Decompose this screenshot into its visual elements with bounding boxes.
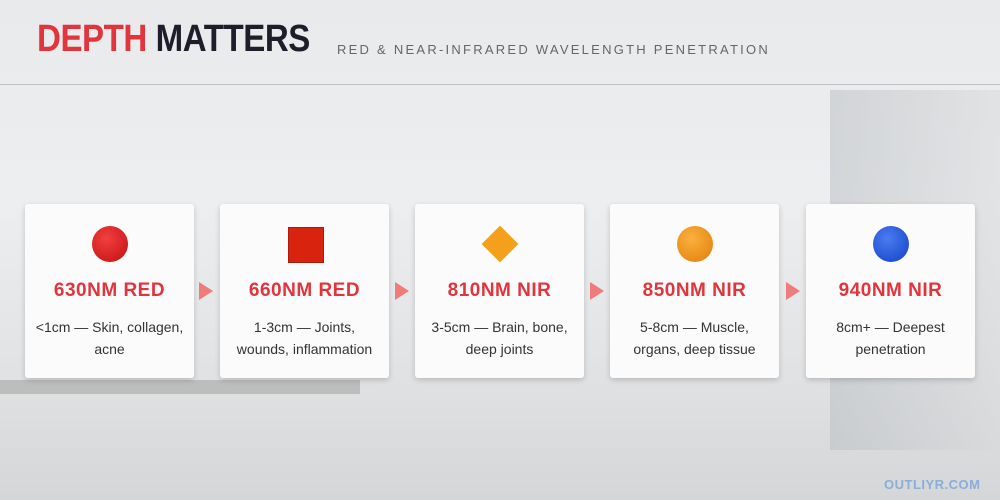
card: 630nm: 630NM RED xyxy=(54,280,165,301)
card: 850nm: 850NM NIR xyxy=(643,280,746,301)
card: 940nm xyxy=(806,204,975,378)
icon: red circle xyxy=(92,226,128,262)
card: 850nm: 5-8cm — Muscle, organs, deep tissue xyxy=(633,319,756,357)
arrow xyxy=(395,282,409,300)
watermark: OUTLIYR.COM xyxy=(884,477,980,492)
card: 630nm: <1cm — Skin, collagen, acne xyxy=(36,319,183,357)
icon: red square xyxy=(288,227,324,263)
icon: orange diamond xyxy=(482,226,518,262)
card: 810nm xyxy=(415,204,584,378)
icon: orange circle xyxy=(677,226,713,262)
card: 940nm: 940NM NIR xyxy=(839,280,942,301)
card: 940nm: 8cm+ — Deepest penetration xyxy=(836,319,945,357)
arrow xyxy=(590,282,604,300)
title: DEPTH MATTERS xyxy=(37,18,310,60)
subtitle: RED & NEAR-INFRARED WAVELENGTH PENETRATION xyxy=(337,42,770,57)
card: 630nm xyxy=(25,204,194,378)
card: 660nm xyxy=(220,204,389,378)
icon: blue circle xyxy=(873,226,909,262)
card: 810nm: 3-5cm — Brain, bone, deep joints xyxy=(431,319,568,357)
card: 660nm: 1-3cm — Joints, wounds, inflammation xyxy=(237,319,372,357)
arrow xyxy=(786,282,800,300)
card: 850nm xyxy=(610,204,779,378)
card: 810nm: 810NM NIR xyxy=(448,280,551,301)
card: 660nm: 660NM RED xyxy=(249,280,360,301)
arrow xyxy=(199,282,213,300)
